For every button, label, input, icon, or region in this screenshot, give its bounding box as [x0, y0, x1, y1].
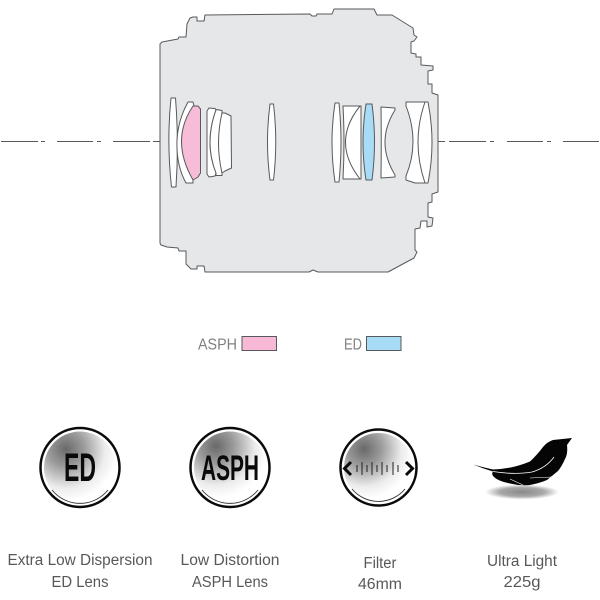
icon: ED lens badge [40, 428, 120, 507]
lens element 4 [210, 110, 222, 176]
lens element 10 inner curve [418, 102, 425, 183]
icon: ASPH lens badge [190, 428, 270, 507]
legend: ASPH [198, 336, 276, 354]
legend: ED: ED [344, 336, 362, 354]
icon: feather [473, 438, 572, 500]
caption: filter: 46mm [358, 576, 402, 593]
icon: ED lens badge: ED [64, 446, 96, 490]
icon: ASPH lens badge: ASPH [201, 449, 259, 488]
aspherical lens element, pink [182, 106, 200, 180]
caption: ASPH lens: ASPH Lens [192, 574, 268, 591]
legend: ED [344, 336, 401, 354]
caption: ASPH lens: Low Distortion [180, 552, 280, 569]
lens element 7 [332, 103, 341, 182]
lens element 2 [177, 102, 194, 183]
lens barrel body [160, 9, 438, 272]
optical axis line [1, 140, 599, 142]
lens cross-section diagram [160, 9, 438, 272]
extra low dispersion lens element, blue [363, 104, 374, 180]
lens element 1 [169, 98, 177, 187]
caption: filter: Filter [364, 555, 396, 572]
caption: ED lens: ED Lens [52, 574, 109, 591]
lens element 9 [381, 107, 395, 178]
lens element 6 [268, 104, 276, 180]
caption: weight: 225g [504, 574, 540, 591]
caption: weight: Ultra Light [487, 553, 558, 570]
lens element 5 [218, 113, 232, 173]
lens element 8 inner curve [346, 106, 360, 179]
lens element 3 [207, 108, 216, 177]
icon: filter badge [340, 430, 416, 506]
legend: ASPH: ASPH [198, 336, 237, 354]
lens element 8 [343, 106, 361, 179]
lens element 10 [406, 102, 432, 183]
caption: ED lens: Extra Low Dispersion [8, 552, 152, 569]
